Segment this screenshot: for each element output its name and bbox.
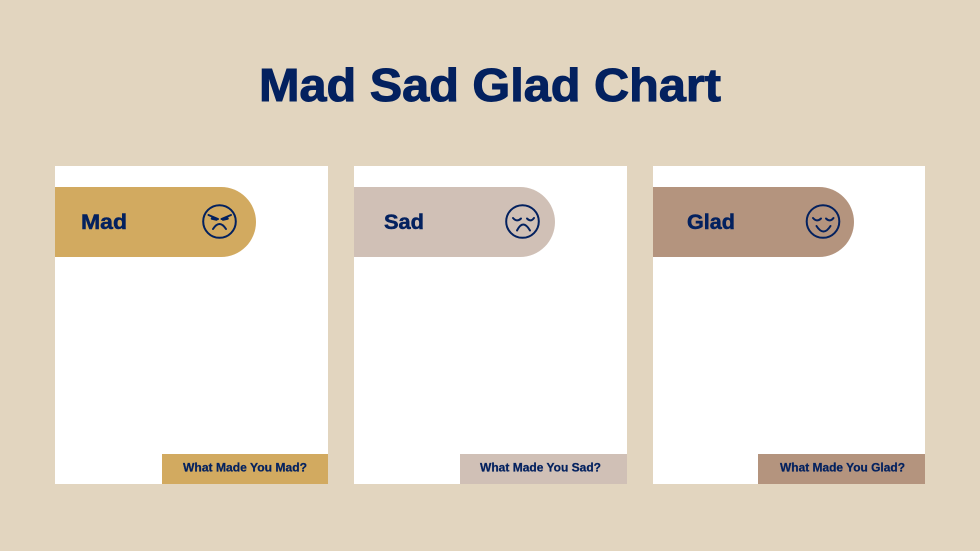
glad header pill bbox=[653, 187, 854, 257]
mad footer label: What Made You Mad? bbox=[183, 462, 307, 474]
panel: sad bbox=[354, 166, 627, 484]
sad heading: Sad bbox=[384, 211, 424, 234]
glad footer label: What Made You Glad? bbox=[780, 462, 905, 474]
sad footer tab bbox=[460, 454, 627, 484]
panel: glad bbox=[653, 166, 925, 484]
mad header pill bbox=[55, 187, 256, 257]
mad footer tab bbox=[162, 454, 328, 484]
icon: glad face bbox=[807, 205, 839, 238]
sad footer label: What Made You Sad? bbox=[480, 462, 601, 474]
icon: sad face bbox=[506, 205, 539, 238]
icon: angry face bbox=[203, 205, 236, 238]
sad header pill bbox=[354, 187, 555, 257]
glad heading: Glad bbox=[687, 211, 735, 234]
panel: mad bbox=[55, 166, 328, 484]
glad footer tab bbox=[758, 454, 925, 484]
mad heading: Mad bbox=[81, 211, 127, 234]
title: Mad Sad Glad Chart bbox=[259, 59, 721, 111]
